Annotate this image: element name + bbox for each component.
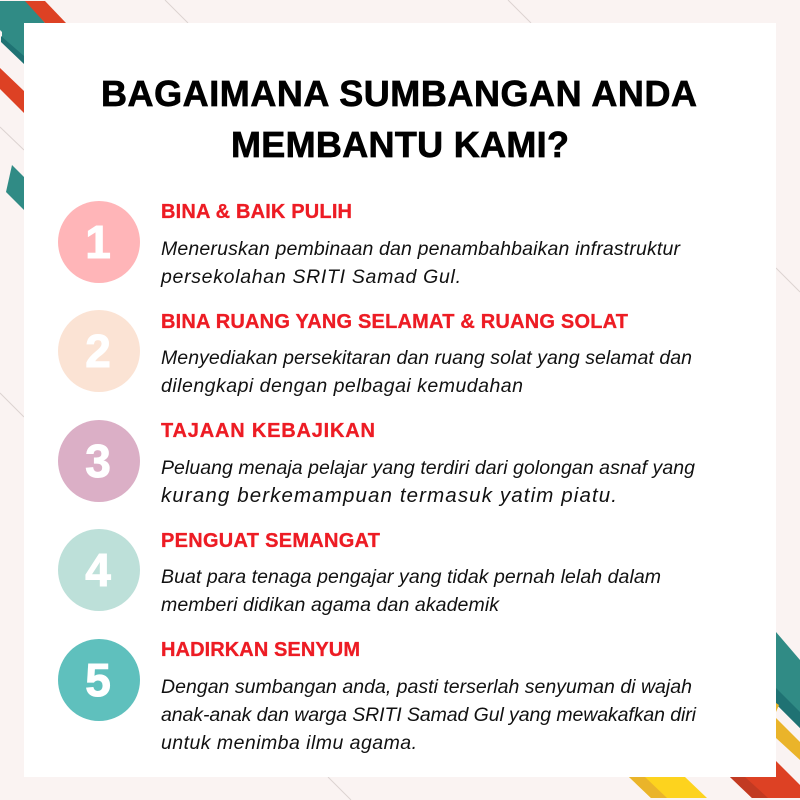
number circle 2: 2 [85, 325, 111, 377]
number circle 5: 5 [85, 654, 111, 706]
decoration: top-left shapes [0, 1, 66, 210]
body 2: dilengkapi dengan pelbagai kemudahan [161, 375, 523, 397]
number circle 3 [58, 420, 140, 502]
body 5 [161, 676, 697, 754]
body 3: Peluang menaja pelajar yang terdiri dari golongan asnaf yang [161, 457, 695, 479]
heading 2: BINA RUANG YANG SELAMAT & RUANG SOLAT [161, 311, 628, 333]
number circle 5 [58, 639, 140, 721]
item 4 [58, 529, 661, 616]
number circle 2 [58, 310, 140, 392]
body 2 [161, 347, 692, 397]
body 1: Meneruskan pembinaan dan penambahbaikan infrastruktur [161, 238, 682, 260]
heading 5: HADIRKAN SENYUM [161, 639, 360, 661]
title [101, 73, 697, 165]
heading 3: TAJAAN KEBAJIKAN [161, 420, 375, 442]
heading 1: BINA & BAIK PULIH [161, 201, 352, 223]
number circle 3: 3 [85, 435, 111, 487]
body 1 [160, 238, 682, 288]
heading 4: PENGUAT SEMANGAT [161, 530, 380, 552]
item 3 [58, 420, 695, 507]
body 5: untuk menimba ilmu agama. [161, 732, 417, 754]
body 1: persekolahan SRITI Samad Gul. [160, 266, 461, 288]
item 2 [58, 310, 692, 397]
body 4 [161, 566, 661, 616]
number circle 1: 1 [85, 216, 111, 268]
item 5 [58, 639, 697, 754]
body 5: Dengan sumbangan anda, pasti terserlah senyuman di wajah [161, 676, 692, 698]
body 5: anak-anak dan warga SRITI Samad Gul yang mewakafkan diri [161, 704, 697, 726]
body 4: Buat para tenaga pengajar yang tidak pernah lelah dalam [161, 566, 661, 588]
item 1 [58, 201, 682, 288]
number circle 4 [58, 529, 140, 611]
body 3: kurang berkemampuan termasuk yatim piatu. [161, 484, 617, 507]
decoration: bottom-right shapes [629, 632, 800, 798]
number circle 1 [58, 201, 140, 283]
number circle 4: 4 [85, 544, 111, 596]
body 3 [161, 457, 695, 507]
title: BAGAIMANA SUMBANGAN ANDA [101, 73, 697, 114]
body 2: Menyediakan persekitaran dan ruang solat yang selamat dan [161, 347, 692, 369]
body 4: memberi didikan agama dan akademik [161, 594, 500, 616]
title: MEMBANTU KAMI? [231, 124, 569, 165]
